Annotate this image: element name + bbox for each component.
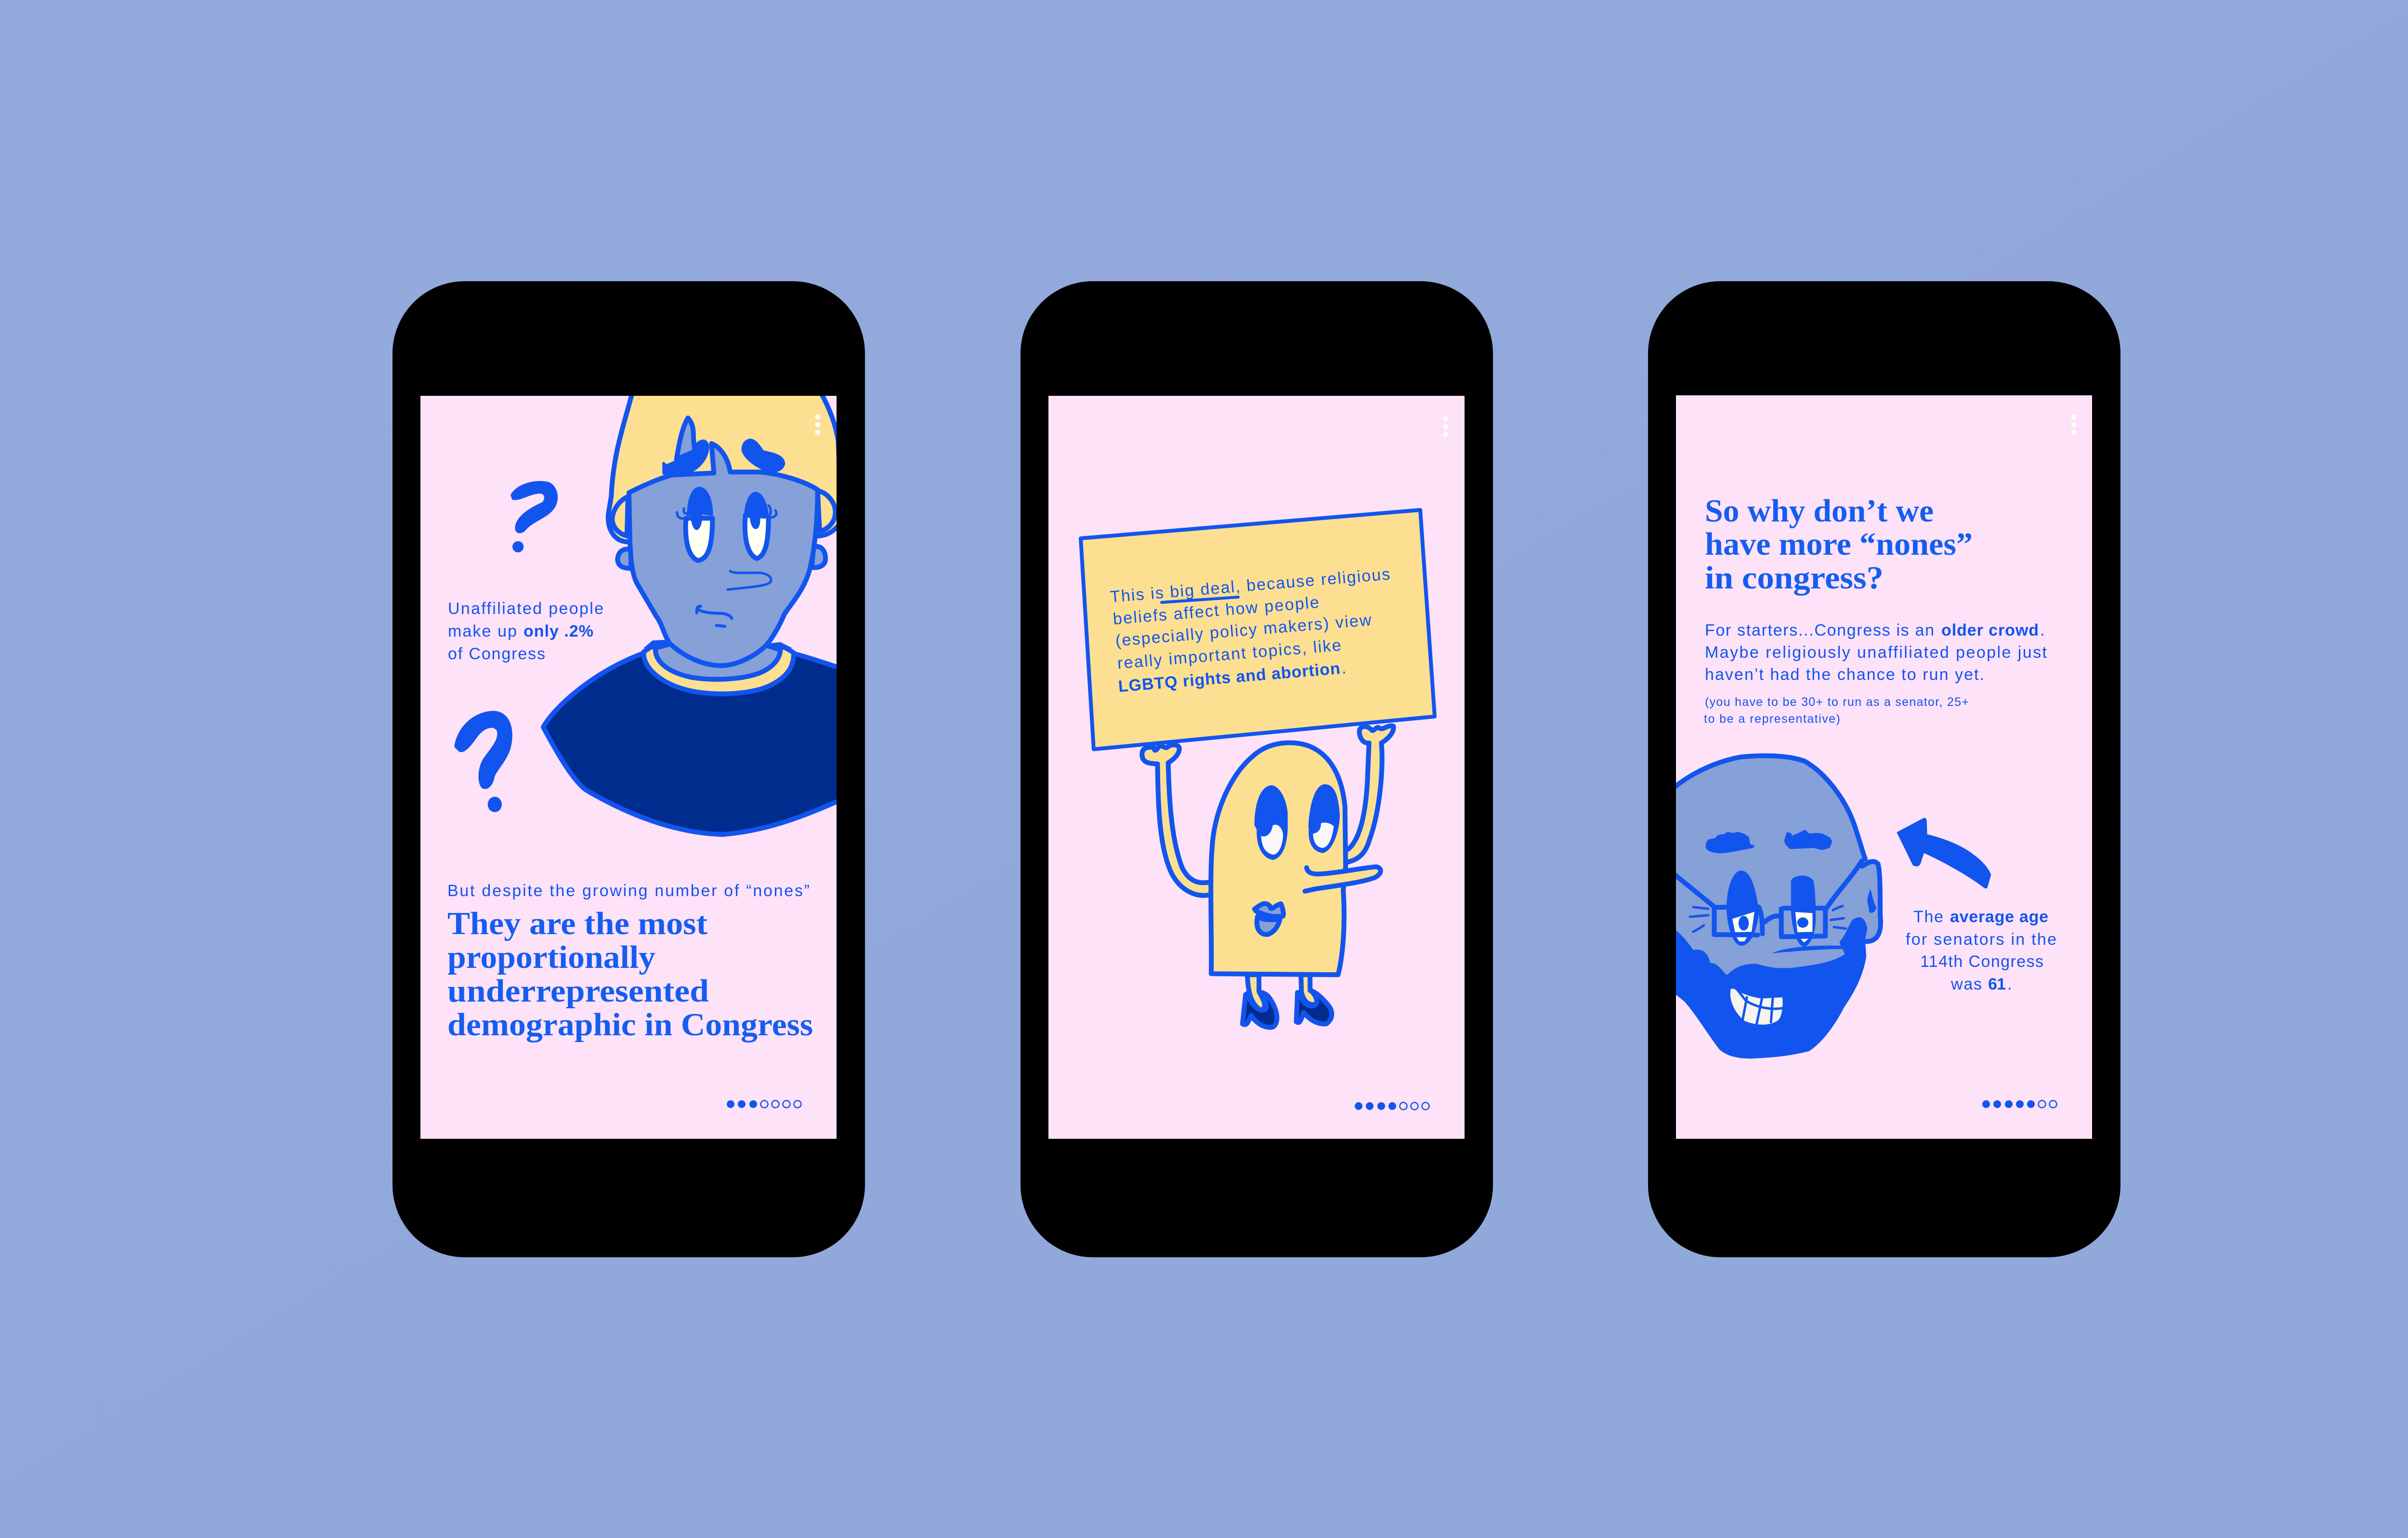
right lashes — [769, 506, 776, 517]
hair — [608, 391, 841, 542]
text: intro line: But despite the growing number of “nones” — [447, 882, 810, 900]
body text: older crowd — [1941, 621, 2039, 639]
footnote: to be a representative) — [1704, 712, 1840, 726]
left eyelid — [687, 487, 713, 530]
pointing nose arm — [1305, 867, 1381, 891]
callout text: 114th Congress — [1920, 952, 2043, 971]
screen — [1048, 396, 1465, 1139]
pagination dots — [1355, 1102, 1429, 1110]
right arm — [1348, 726, 1393, 862]
left leg — [1247, 975, 1265, 1010]
whiskers — [1690, 906, 1846, 932]
right hair lobe — [818, 491, 835, 531]
menu dots — [815, 414, 821, 435]
sign text: beliefs affect how people — [1112, 593, 1320, 628]
phone body — [393, 281, 865, 1257]
left eye white — [1261, 825, 1283, 855]
collar — [643, 646, 794, 694]
text: unaffiliated people: Unaffiliated people — [448, 600, 603, 618]
skull outline — [1674, 756, 1865, 859]
sign text: really important topics, like — [1117, 636, 1342, 673]
ear detail — [1867, 889, 1876, 913]
callout text: 61 — [1988, 975, 2006, 993]
collar knots — [644, 639, 792, 651]
footnote: (you have to be 30+ to run as a senator, 25+ — [1705, 695, 1969, 709]
upper lip — [1255, 904, 1283, 916]
right eye — [1309, 784, 1340, 853]
menu dots — [1443, 416, 1449, 437]
left strap — [1675, 875, 1714, 907]
sign board — [1081, 510, 1435, 749]
left eyebrow — [1706, 832, 1754, 853]
illustration: character holding sign — [1142, 726, 1393, 1028]
body — [1211, 743, 1346, 975]
illustration: blond person — [543, 391, 848, 834]
left eye lid — [1727, 871, 1759, 946]
left ear — [617, 549, 631, 568]
glasses — [1714, 907, 1825, 937]
heading: So why don’t we — [1705, 493, 1934, 529]
sign text: . — [1341, 659, 1347, 678]
heading: demographic in Congress — [447, 1007, 813, 1043]
right eyebrow — [1784, 830, 1832, 850]
underline: big deal — [1162, 597, 1238, 602]
right iris — [1797, 917, 1808, 928]
neck — [655, 644, 780, 679]
text: unaffiliated people: make up — [448, 622, 517, 640]
hair spike — [677, 418, 695, 459]
left eye white — [1732, 912, 1754, 941]
panel: phone 1 — [393, 281, 865, 1257]
sign text: (especially policy makers) view — [1115, 611, 1372, 650]
heading: proportionally — [447, 939, 655, 975]
menu dots — [2071, 414, 2077, 435]
right leg — [1301, 975, 1317, 1004]
panel: phone 3 — [1648, 281, 2120, 1257]
sign text: This is big deal, because religious — [1110, 565, 1391, 606]
phone body — [1648, 281, 2120, 1257]
sign text — [1110, 565, 1391, 696]
right shoe — [1296, 991, 1332, 1024]
right eye white — [1313, 822, 1334, 848]
left eyebrow — [662, 440, 709, 477]
heading: in congress? — [1705, 560, 1884, 596]
screen — [1676, 395, 2092, 1139]
left arm — [1142, 745, 1209, 896]
left shoe — [1243, 992, 1277, 1028]
right eye white — [1795, 912, 1812, 942]
head — [608, 391, 841, 694]
sign — [1081, 510, 1435, 749]
nose — [728, 571, 771, 589]
left eye — [686, 518, 712, 560]
teeth — [1730, 989, 1783, 1025]
arrow — [1897, 818, 1991, 888]
panel: phone 2 — [1021, 281, 1493, 1257]
right eyelid — [744, 492, 769, 529]
screen — [420, 396, 837, 1139]
callout text: The — [1913, 908, 1943, 926]
text: unaffiliated people: only .2% — [523, 622, 593, 640]
right eye — [745, 515, 769, 559]
phone body — [1021, 281, 1493, 1257]
callout text: for senators in the — [1906, 930, 2056, 949]
nose — [1772, 946, 1846, 953]
mouth — [697, 606, 732, 626]
left eye — [1255, 785, 1288, 860]
callout text: average age — [1950, 908, 2048, 926]
face — [629, 443, 818, 665]
sign text: LGBTQ rights and abortion — [1118, 659, 1341, 696]
callout text: was — [1950, 975, 1982, 993]
body text: haven’t had the chance to run yet. — [1705, 665, 1984, 684]
heading: They are the most — [447, 906, 708, 941]
body text: Maybe religiously unaffiliated people just — [1705, 643, 2047, 662]
heading: underrepresented — [447, 973, 709, 1009]
heading: have more “nones” — [1705, 526, 1973, 562]
beard — [1674, 917, 1867, 1058]
head — [1674, 756, 1880, 1000]
illustration: bald senator — [1674, 756, 1881, 1058]
left lashes — [677, 508, 688, 519]
pagination dots — [1982, 1100, 2056, 1108]
question mark upper — [510, 481, 558, 552]
right eye lid — [1791, 875, 1816, 947]
left hair lobe — [612, 496, 628, 536]
pagination dots — [727, 1100, 801, 1108]
lower lip — [1257, 916, 1280, 935]
text: unaffiliated people: of Congress — [448, 645, 545, 663]
right strap — [1826, 861, 1862, 908]
shirt — [543, 652, 848, 834]
body text: For starters...Congress is an — [1705, 621, 1934, 639]
body text: . — [2040, 621, 2044, 639]
ear — [1862, 861, 1881, 941]
left iris — [1739, 916, 1749, 930]
right ear — [812, 547, 825, 568]
callout text: . — [2007, 975, 2012, 993]
right eyebrow — [741, 439, 785, 473]
teeth lines — [1737, 989, 1783, 1024]
question mark lower — [454, 711, 512, 812]
